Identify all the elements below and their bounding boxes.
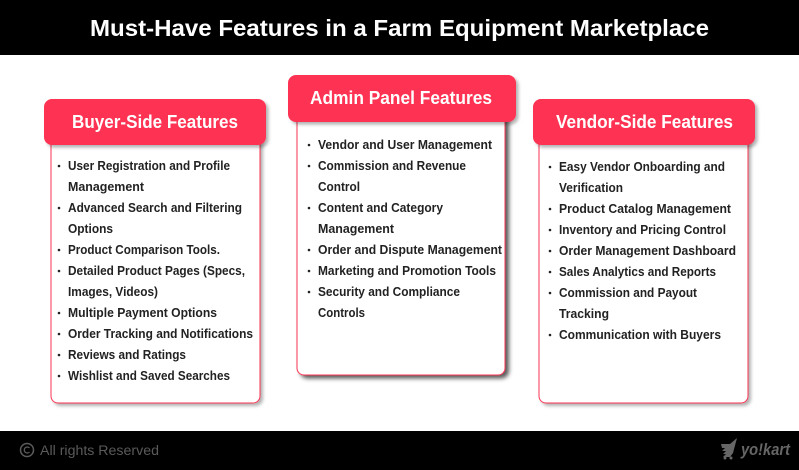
admin feature list: Management bbox=[318, 222, 395, 236]
admin header: Admin Panel Features bbox=[310, 88, 492, 108]
admin header bbox=[288, 75, 516, 122]
admin feature list: Controls bbox=[318, 306, 365, 320]
title bar bbox=[0, 0, 799, 55]
buyer feature list: Order Tracking and Notifications bbox=[68, 327, 253, 341]
admin list card bbox=[297, 105, 505, 375]
buyer feature list: Images, Videos) bbox=[68, 285, 158, 299]
vendor feature list bbox=[549, 160, 736, 342]
vendor feature list: Verification bbox=[559, 181, 623, 195]
admin feature list bbox=[308, 138, 503, 320]
buyer feature list: Wishlist and Saved Searches bbox=[68, 369, 230, 383]
buyer feature list: Product Comparison Tools. bbox=[68, 243, 220, 257]
admin feature list: Control bbox=[318, 180, 360, 194]
vendor feature list: Inventory and Pricing Control bbox=[559, 223, 726, 237]
buyer feature list: Management bbox=[68, 180, 145, 194]
vendor feature list: Communication with Buyers bbox=[559, 328, 721, 342]
buyer list card bbox=[51, 130, 260, 403]
footer bar bbox=[0, 431, 799, 470]
buyer feature list: Options bbox=[68, 222, 113, 236]
vendor list card bbox=[539, 130, 748, 403]
logo: yolkart bbox=[721, 438, 791, 460]
buyer feature list: Multiple Payment Options bbox=[68, 306, 217, 320]
vendor feature list: Order Management Dashboard bbox=[559, 244, 736, 258]
buyer feature list: Advanced Search and Filtering bbox=[68, 201, 242, 215]
vendor feature list: Commission and Payout bbox=[559, 286, 698, 300]
admin feature list: Vendor and User Management bbox=[318, 138, 493, 152]
logo wordmark: yo!kart bbox=[740, 440, 791, 459]
vendor feature list: Sales Analytics and Reports bbox=[559, 265, 716, 279]
buyer feature list: Reviews and Ratings bbox=[68, 348, 186, 362]
admin feature list: Security and Compliance bbox=[318, 285, 460, 299]
buyer feature list: Detailed Product Pages (Specs, bbox=[68, 264, 245, 278]
icon: copyright bbox=[20, 444, 34, 456]
panel: buyer-side features bbox=[44, 99, 266, 403]
buyer header: Buyer-Side Features bbox=[72, 112, 238, 132]
vendor feature list: Easy Vendor Onboarding and bbox=[559, 160, 725, 174]
vendor feature list: Product Catalog Management bbox=[559, 202, 732, 216]
buyer feature list bbox=[58, 159, 253, 383]
panel: vendor-side features bbox=[533, 99, 755, 403]
panel: admin panel features bbox=[288, 75, 516, 375]
title: Must-Have Features in a Farm Equipment Marketplace bbox=[90, 15, 709, 41]
admin feature list: Content and Category bbox=[318, 201, 443, 215]
buyer feature list: User Registration and Profile bbox=[68, 159, 230, 173]
icon: cart bbox=[721, 438, 737, 460]
vendor header: Vendor-Side Features bbox=[556, 112, 733, 132]
admin feature list: Marketing and Promotion Tools bbox=[318, 264, 496, 278]
buyer header bbox=[44, 99, 266, 145]
vendor header bbox=[533, 99, 755, 145]
copyright text: All rights Reserved bbox=[40, 443, 159, 458]
vendor feature list: Tracking bbox=[559, 307, 609, 321]
admin feature list: Commission and Revenue bbox=[318, 159, 466, 173]
admin feature list: Order and Dispute Management bbox=[318, 243, 503, 257]
